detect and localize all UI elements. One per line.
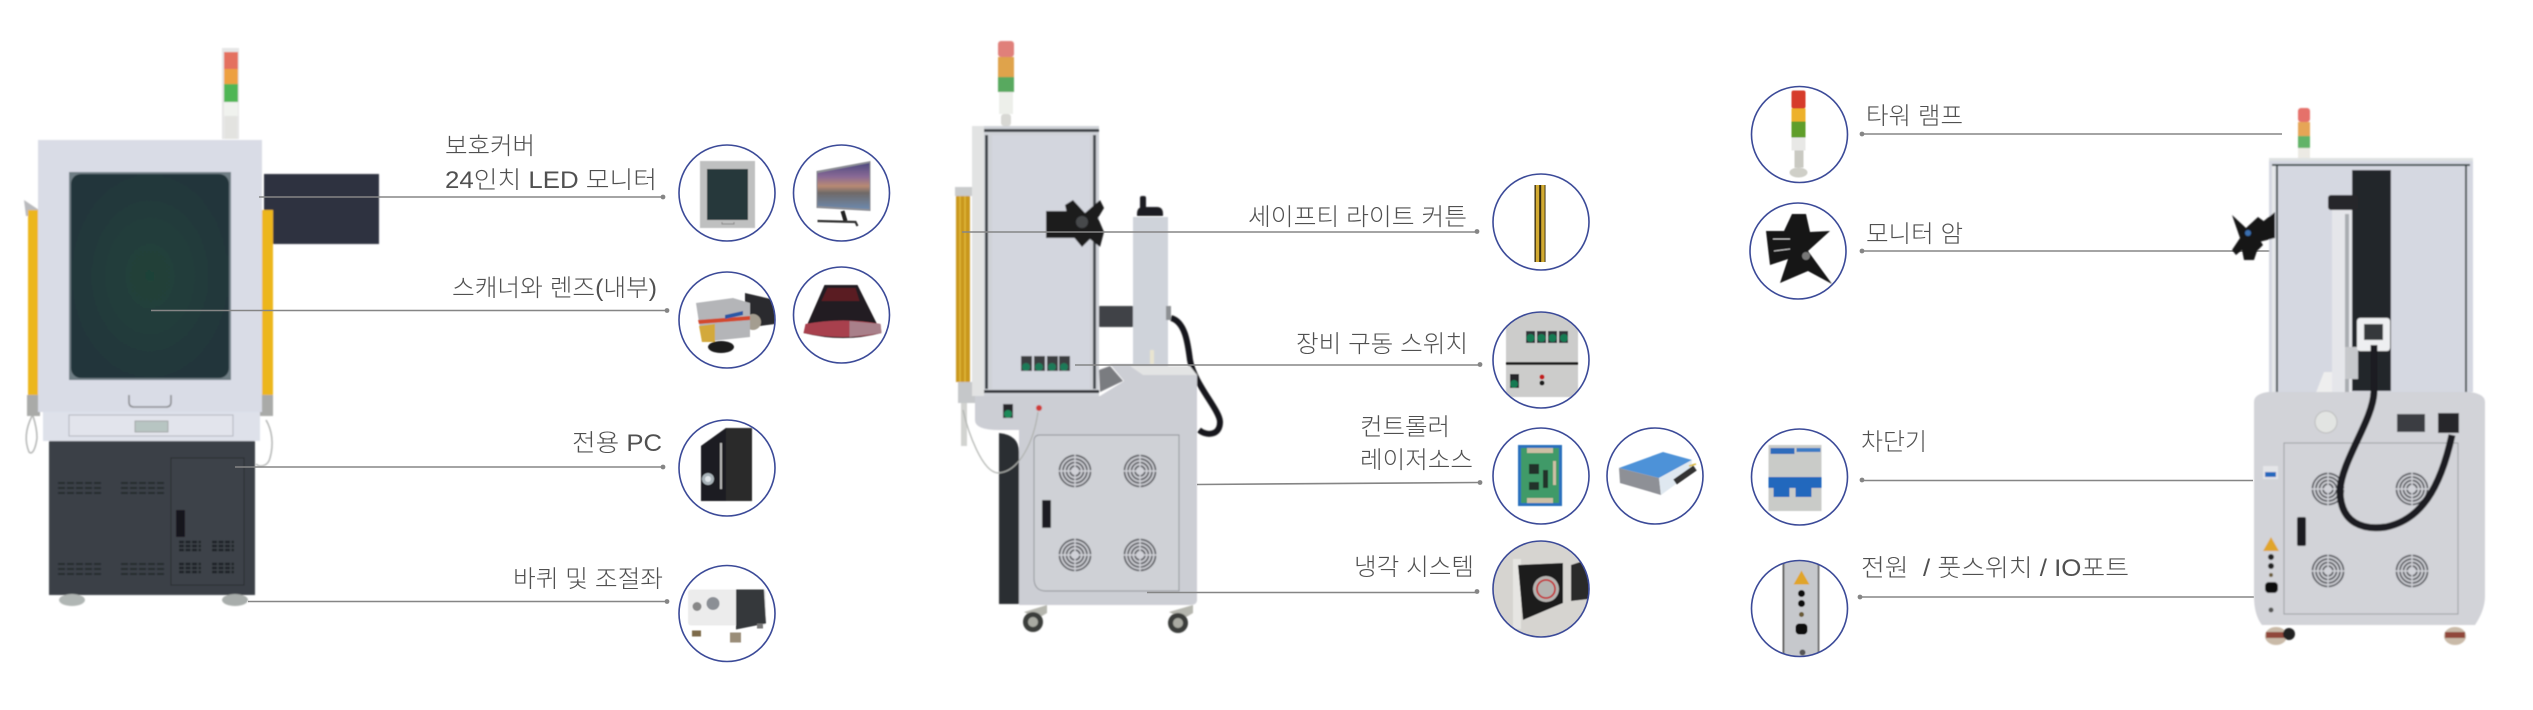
callout: tower lamp: 타워 램프 bbox=[1866, 103, 1963, 130]
cabinet window bbox=[69, 172, 231, 380]
thumbnail: controller board bbox=[1493, 428, 1589, 524]
callout: cover and monitor bbox=[259, 133, 665, 199]
rating plate bbox=[2397, 414, 2425, 432]
casters bbox=[1023, 605, 1193, 633]
Z axis arm bbox=[1099, 306, 1133, 327]
ventilation fans bbox=[1058, 454, 1157, 572]
callout: monitor arm: 모니터 암 bbox=[1866, 221, 1963, 248]
monitor arm bbox=[2232, 212, 2275, 260]
callout: power / foot switch / IO port bbox=[1858, 555, 2254, 599]
switches bbox=[1021, 356, 1070, 371]
monitor arm bbox=[1046, 200, 1104, 247]
thumbnail: light curtain bbox=[1493, 174, 1589, 270]
callout: controller and laser source bbox=[1197, 414, 1482, 485]
callout: wheels: 바퀴 및 조절좌 bbox=[513, 566, 663, 593]
thumbnail: tower lamp bbox=[1752, 86, 1848, 182]
callouts: front view bbox=[151, 133, 669, 604]
adjuster feet bbox=[2265, 627, 2466, 645]
callout: cooling system: 냉각 시스템 bbox=[1354, 554, 1474, 581]
callout: drive switch bbox=[1075, 331, 1482, 367]
fibre cable bbox=[2340, 345, 2452, 528]
power socket bbox=[2438, 413, 2459, 433]
tower lamp bbox=[998, 41, 1014, 126]
callout: controller and laser source: 레이저소스 bbox=[1360, 447, 1473, 474]
callout: monitor arm bbox=[1860, 221, 2272, 253]
light curtain bbox=[955, 187, 990, 446]
callout: dedicated PC: 전용 PC bbox=[572, 430, 662, 457]
tower lamp bbox=[2298, 108, 2310, 158]
thumbnail: scanner bbox=[679, 272, 775, 368]
fibre cable bbox=[1171, 318, 1220, 434]
thumbnail: drive switches bbox=[1493, 312, 1589, 408]
right light curtain bbox=[256, 210, 273, 466]
tower lamp bbox=[222, 48, 239, 139]
door handle bbox=[1042, 500, 1051, 528]
machine: side view bbox=[955, 41, 1220, 633]
callout: tower lamp bbox=[1860, 103, 2282, 136]
gantry column bbox=[2315, 170, 2391, 395]
monitor back panel bbox=[264, 174, 379, 244]
machine: rear view bbox=[2232, 108, 2485, 645]
left light curtain bbox=[24, 200, 40, 453]
thumbnail: cooling fan bbox=[1493, 541, 1589, 637]
callout: cooling system bbox=[1147, 554, 1479, 594]
callouts: rear view bbox=[1858, 103, 2282, 599]
thumbnail: LED monitor bbox=[794, 145, 890, 241]
enclosure bbox=[972, 126, 1099, 396]
thumbnail: power panel bbox=[1752, 560, 1848, 656]
callout: wheels bbox=[248, 566, 669, 604]
callout: dedicated PC bbox=[235, 430, 665, 469]
warning and ports panel bbox=[2263, 537, 2279, 612]
thumbnail: laser source bbox=[1607, 428, 1703, 524]
gauge bbox=[2315, 411, 2337, 433]
thumbnail: circuit breaker bbox=[1752, 429, 1848, 525]
thumbnail: PC tower bbox=[679, 420, 775, 516]
thumbnail: monitor arm bbox=[1750, 203, 1846, 299]
enclosure bbox=[2269, 158, 2473, 392]
feet bbox=[59, 594, 248, 606]
cabinet bbox=[38, 140, 262, 441]
base body bbox=[975, 364, 1197, 605]
callout: breaker bbox=[1860, 429, 2253, 482]
callout: controller and laser source: 컨트롤러 bbox=[1360, 414, 1450, 441]
callout: drive switch: 장비 구동 스위치 bbox=[1296, 331, 1468, 358]
callout: breaker: 차단기 bbox=[1861, 429, 1927, 456]
thumbnail: lens bbox=[794, 267, 890, 363]
callout: power / foot switch / IO port: 전원 / 풋스위치 / IO포트 bbox=[1861, 555, 2129, 582]
door handle bbox=[2297, 517, 2306, 546]
callout: safety light curtain: 세이프티 라이트 커튼 bbox=[1248, 204, 1467, 231]
base cabinet bbox=[49, 441, 255, 595]
callouts: side view bbox=[962, 204, 1482, 594]
callout: scanner and lens: 스캐너와 렌즈(내부) bbox=[452, 275, 657, 302]
laser head bracket bbox=[2357, 318, 2390, 351]
callout: cover and monitor: 24인치 LED 모니터 bbox=[445, 167, 657, 194]
callout: safety light curtain bbox=[962, 204, 1479, 234]
machine: front view bbox=[24, 48, 379, 606]
thumbnail: wheels and adjuster bbox=[679, 566, 775, 662]
callout: scanner and lens bbox=[151, 275, 669, 313]
breaker bbox=[2263, 466, 2278, 479]
power buttons bbox=[963, 404, 1042, 473]
thumbnail: protective cover bbox=[679, 145, 775, 241]
callout: cover and monitor: 보호커버 bbox=[445, 133, 535, 160]
ventilation fans bbox=[2311, 472, 2429, 588]
Z axis head bbox=[1133, 196, 1171, 367]
base body bbox=[2254, 392, 2485, 625]
